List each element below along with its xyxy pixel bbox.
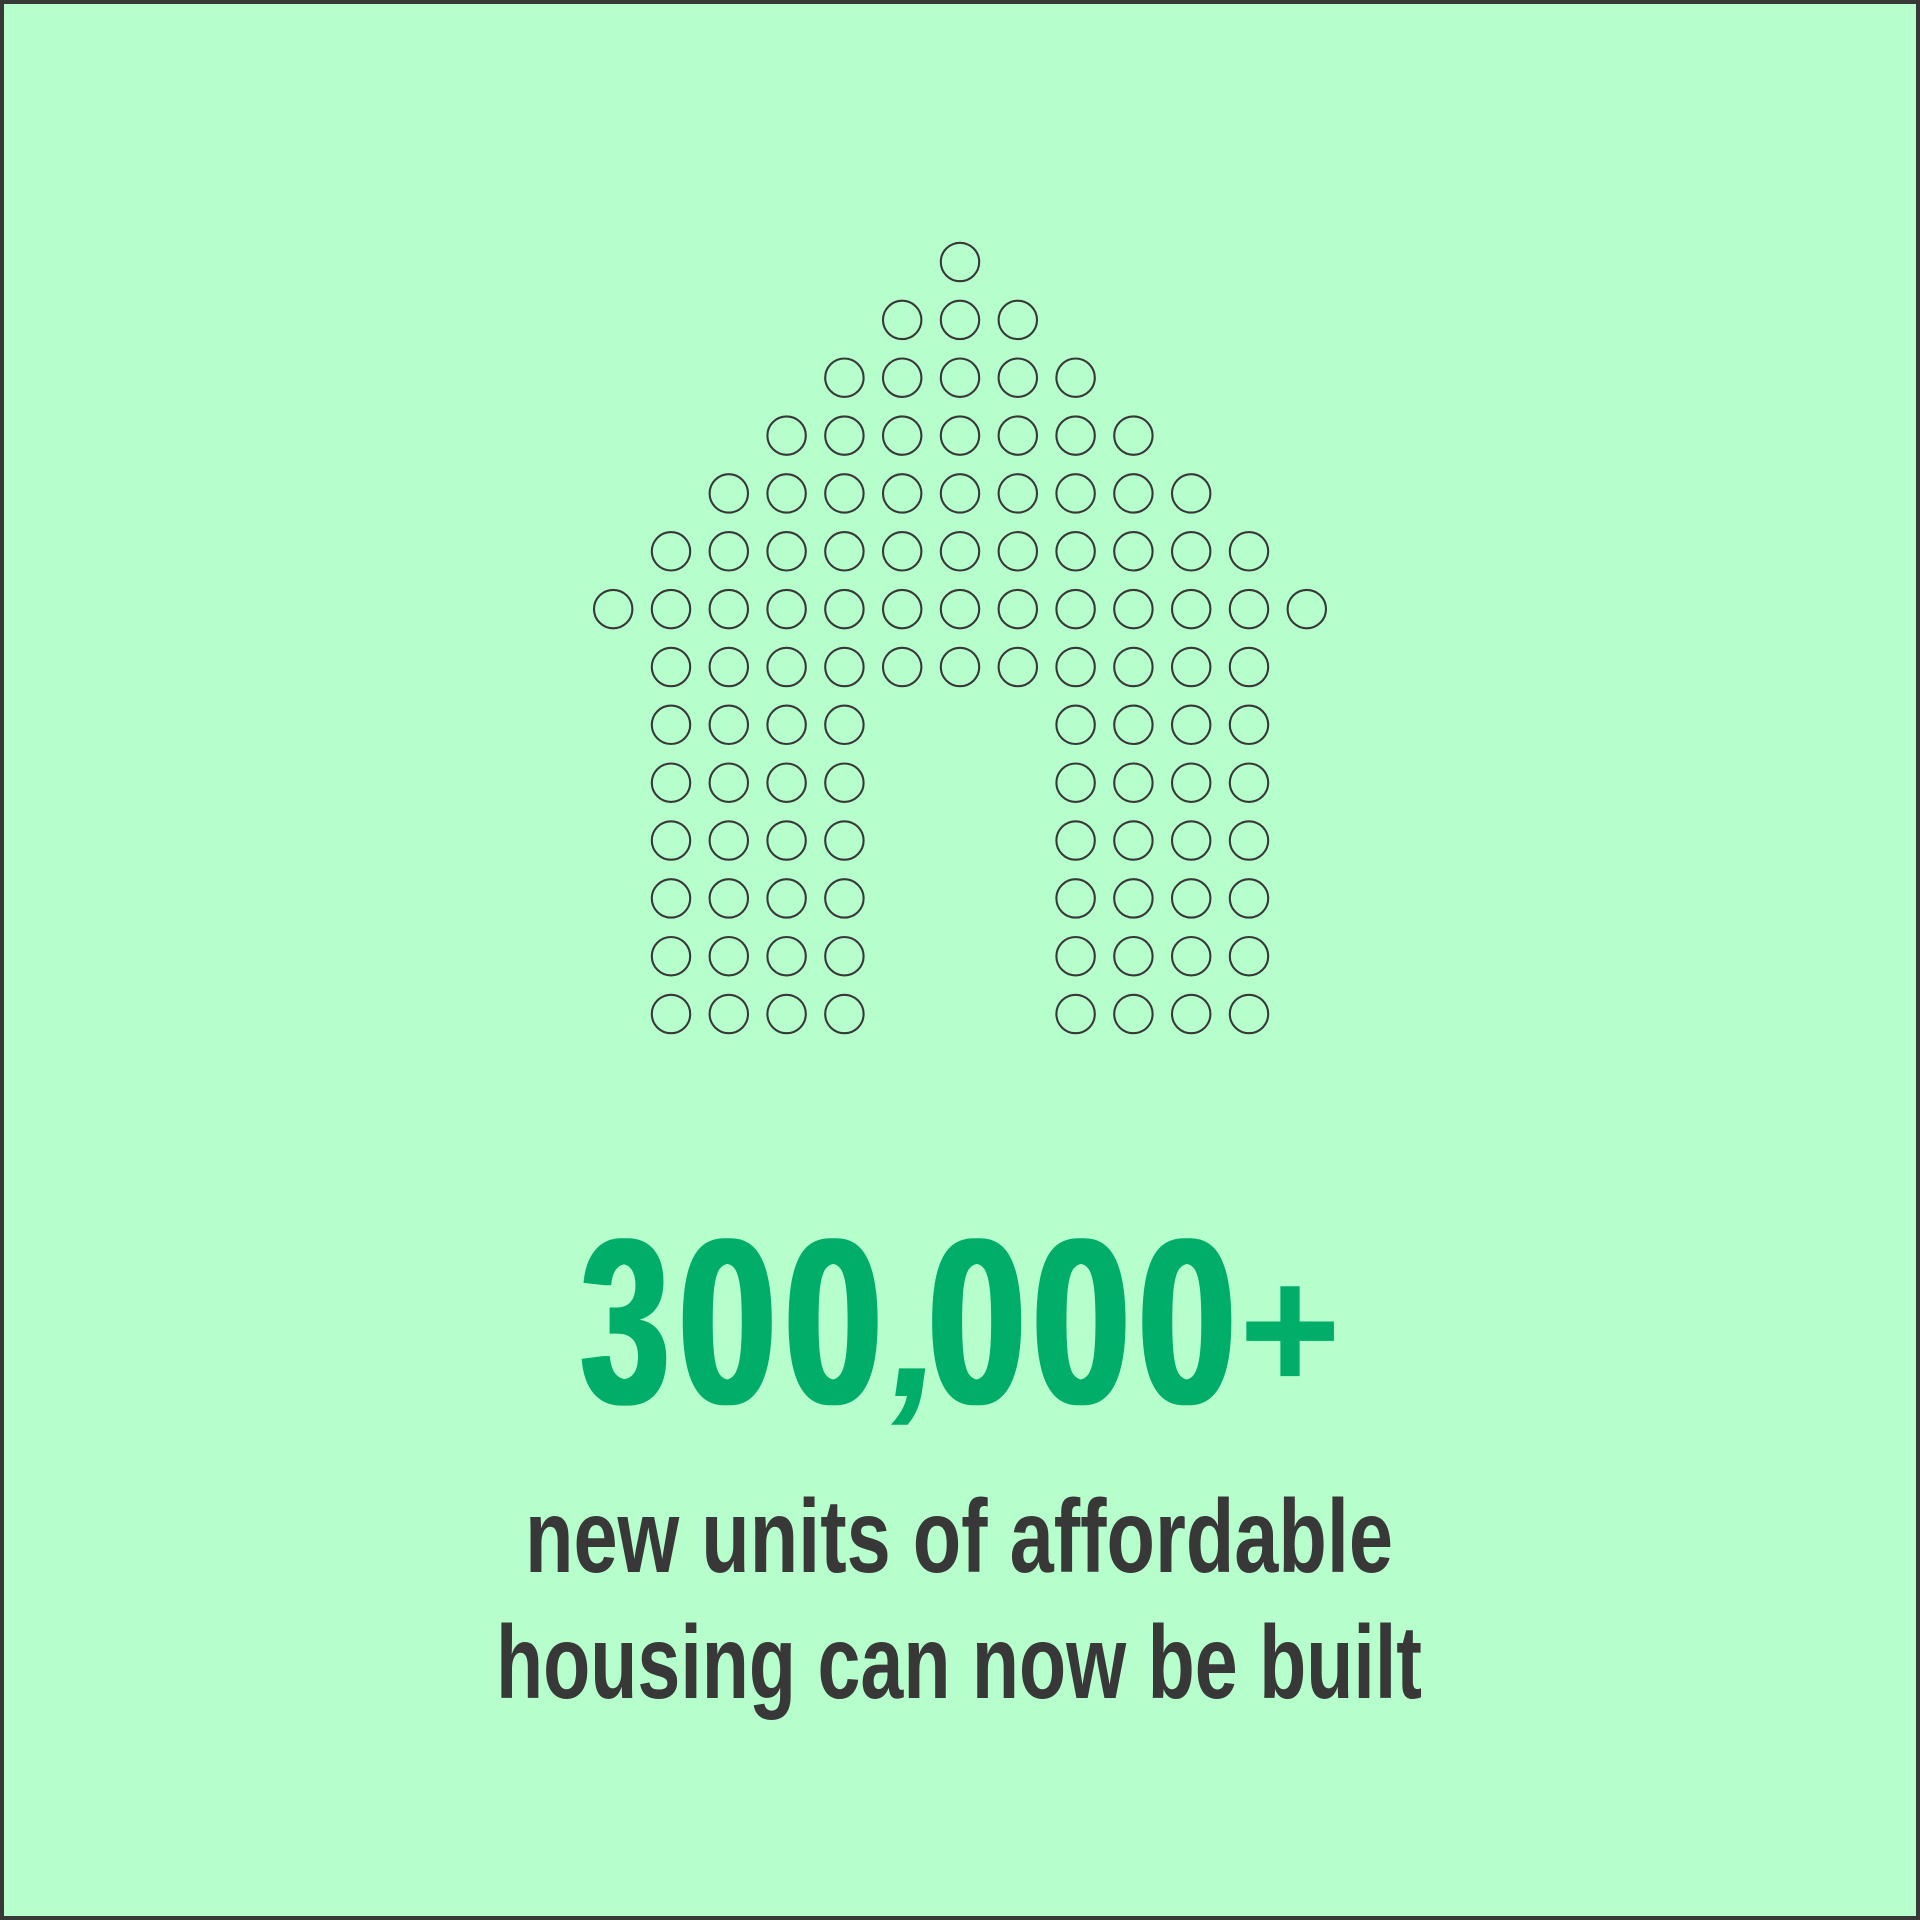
digits of 300,000 xyxy=(581,1189,1236,1454)
headline number xyxy=(581,1189,1341,1454)
plus sign: + xyxy=(1239,1231,1341,1428)
door lintel row of circles xyxy=(652,648,1268,686)
left wall circles xyxy=(652,706,864,1033)
comma: , xyxy=(877,1228,957,1436)
description line 1: new units of affordable xyxy=(525,1479,1393,1595)
icon: house made of circles xyxy=(594,243,1326,1033)
digits of 300,000: 00 xyxy=(679,1189,882,1453)
description line 2: housing can now be built xyxy=(496,1605,1422,1721)
digits of 300,000: 3 xyxy=(581,1189,669,1454)
right wall circles xyxy=(1056,706,1268,1033)
digits of 300,000: 000 xyxy=(928,1189,1236,1453)
house roof circles xyxy=(594,243,1326,628)
